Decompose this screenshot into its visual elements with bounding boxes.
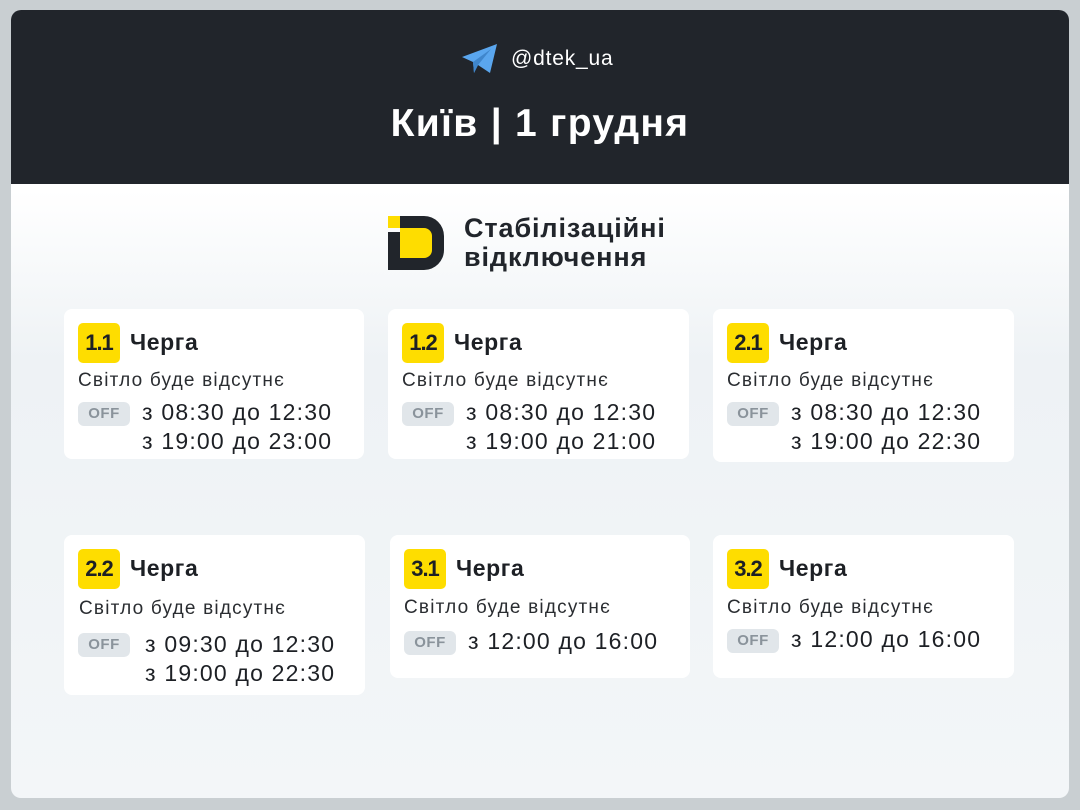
card 1.2: 1.2 bbox=[409, 330, 437, 355]
card 1.1: з 08:30 до 12:30 bbox=[142, 399, 332, 425]
card 3.2: OFF bbox=[737, 632, 769, 649]
card 2.1: з 19:00 до 22:30 bbox=[791, 428, 981, 454]
card 3.1 bbox=[390, 535, 690, 678]
card 3.1: з 12:00 до 16:00 bbox=[468, 628, 658, 654]
card 1.1: 1.1 bbox=[85, 330, 113, 355]
icon: telegram bbox=[462, 44, 497, 73]
card 2.2: 2.2 bbox=[85, 556, 113, 581]
card 3.2 bbox=[713, 535, 1014, 678]
telegram handle: @dtek_ua bbox=[511, 47, 613, 70]
card 1.2 bbox=[388, 309, 689, 459]
card 2.1 bbox=[713, 309, 1014, 462]
card 1.1 bbox=[64, 309, 364, 459]
card 2.2 bbox=[64, 535, 365, 695]
header bbox=[11, 10, 1069, 184]
card 1.2: з 08:30 до 12:30 bbox=[466, 399, 656, 425]
card 2.1: 2.1 bbox=[734, 330, 762, 355]
card 2.2: OFF bbox=[88, 636, 120, 653]
card 2.1: Черга bbox=[779, 329, 847, 355]
card 1.1: Світло буде відсутнє bbox=[78, 370, 285, 391]
card 3.1: Черга bbox=[456, 555, 524, 581]
subheading with logo bbox=[388, 213, 666, 272]
card 3.2: Світло буде відсутнє bbox=[727, 597, 934, 618]
card 2.1: Світло буде відсутнє bbox=[727, 370, 934, 391]
card 1.1: з 19:00 до 23:00 bbox=[142, 428, 332, 454]
card 2.1: OFF bbox=[737, 405, 769, 422]
card 2.2: Черга bbox=[130, 555, 198, 581]
card 1.1: Черга bbox=[130, 329, 198, 355]
card 2.2: Світло буде відсутнє bbox=[79, 598, 286, 619]
card 2.2: з 19:00 до 22:30 bbox=[145, 660, 335, 686]
card 3.2: з 12:00 до 16:00 bbox=[791, 626, 981, 652]
icon: DTEK logo bbox=[388, 216, 444, 270]
card 3.2: Черга bbox=[779, 555, 847, 581]
subheading with logo: відключення bbox=[464, 242, 647, 272]
card 3.1: Світло буде відсутнє bbox=[404, 597, 611, 618]
subheading with logo: Стабілізаційні bbox=[464, 213, 666, 243]
card 3.2: 3.2 bbox=[734, 556, 762, 581]
telegram handle bbox=[462, 44, 613, 73]
card 2.2: з 09:30 до 12:30 bbox=[145, 631, 335, 657]
card 1.2: з 19:00 до 21:00 bbox=[466, 428, 656, 454]
card 3.1: 3.1 bbox=[411, 556, 439, 581]
card 1.2: Світло буде відсутнє bbox=[402, 370, 609, 391]
card 2.1: з 08:30 до 12:30 bbox=[791, 399, 981, 425]
card 1.2: Черга bbox=[454, 329, 522, 355]
card 1.2: OFF bbox=[412, 405, 444, 422]
card 1.1: OFF bbox=[88, 405, 120, 422]
title: Київ | 1 грудня bbox=[391, 102, 689, 145]
card 3.1: OFF bbox=[414, 634, 446, 651]
